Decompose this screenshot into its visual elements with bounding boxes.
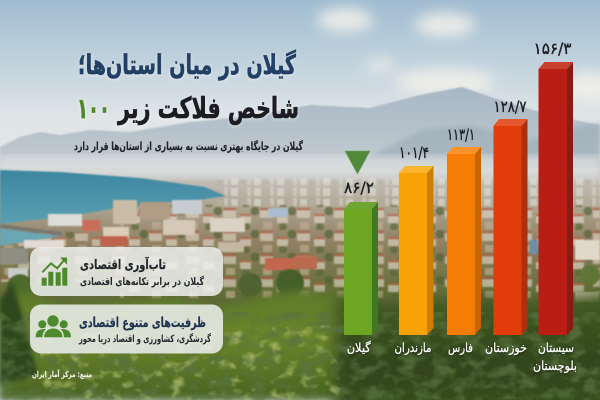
value labels: ۱۲۸/۷ (494, 97, 527, 116)
card 2 text: گردشگری، کشاورزی و اقتصاد دریا محور (78, 332, 211, 345)
title line 2: ۱۰۰ (77, 92, 110, 125)
title line 2: شاخص فلاکت زیر (117, 91, 299, 125)
value labels: ۱۱۳/۱ (447, 125, 475, 144)
category labels: گیلان (347, 340, 371, 355)
category labels: بلوچستان (533, 358, 577, 374)
value labels: ۱۵۶/۳ (534, 39, 572, 58)
title line 2 (77, 91, 299, 125)
card: economic resilience (30, 247, 223, 296)
value labels (344, 39, 572, 197)
background: sky (0, 0, 600, 180)
background: sea (0, 170, 226, 224)
bar: Khuzestan (494, 119, 528, 335)
background: foliage texture (0, 312, 600, 400)
category labels: مازندران (394, 340, 432, 356)
background: city landmarks (0, 200, 600, 302)
source: منبع: مرکز آمار ایران (32, 369, 92, 379)
icon: growth chart (42, 258, 67, 286)
background: clouds (317, 8, 600, 104)
value labels: ۱۰۱/۴ (399, 143, 429, 162)
bar: Mazandaran (399, 166, 434, 335)
value labels: ۸۶/۲ (344, 178, 374, 197)
card 1 text: گیلان در برابر تکانه‌های اقتصادی (80, 275, 205, 288)
background: city land (0, 168, 600, 318)
background: forest foreground (0, 282, 600, 400)
category labels (347, 340, 577, 374)
bar: Fars (447, 147, 481, 335)
background: mountains (0, 87, 600, 190)
background: horizon haze (0, 156, 600, 178)
background: city mid band (0, 205, 600, 300)
category labels: سیستان (538, 340, 574, 355)
card: diverse capacities (30, 304, 223, 354)
background: city far band (215, 178, 600, 206)
bar: Gilan (344, 202, 378, 335)
bar: Sistan and Baluchestan (538, 62, 573, 335)
bar chart (344, 62, 573, 335)
card 1 heading: تاب‌آوری اقتصادی (80, 256, 166, 273)
title line 1: گیلان در میان استان‌ها؛ (78, 49, 296, 81)
subtitle: گیلان در جایگاه بهتری نسبت به بسیاری از استان‌ها قرار دارد (74, 140, 303, 153)
background: inner bay (0, 228, 62, 246)
category labels: فارس (448, 340, 473, 356)
card 2 heading: ظرفیت‌های متنوع اقتصادی (79, 315, 206, 331)
category labels: خوزستان (485, 340, 527, 356)
icon: people (36, 315, 71, 337)
marker: Gilan triangle (345, 151, 370, 174)
